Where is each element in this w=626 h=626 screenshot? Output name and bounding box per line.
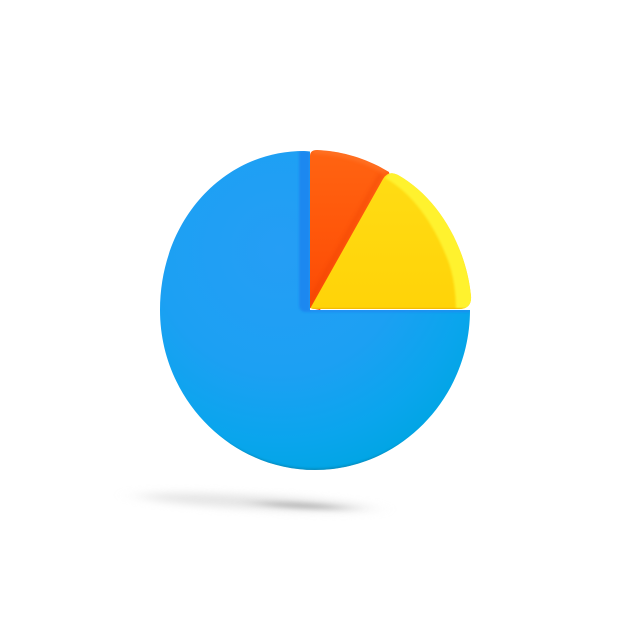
bottom rim shade	[220, 436, 410, 470]
inner wall	[299, 151, 470, 312]
yellow outer rim	[385, 170, 474, 312]
pie chart illustration	[144, 150, 472, 514]
yellow slice	[311, 170, 474, 312]
orange slice	[309, 150, 392, 310]
blue slice	[160, 151, 470, 470]
ground shadow	[140, 489, 370, 515]
